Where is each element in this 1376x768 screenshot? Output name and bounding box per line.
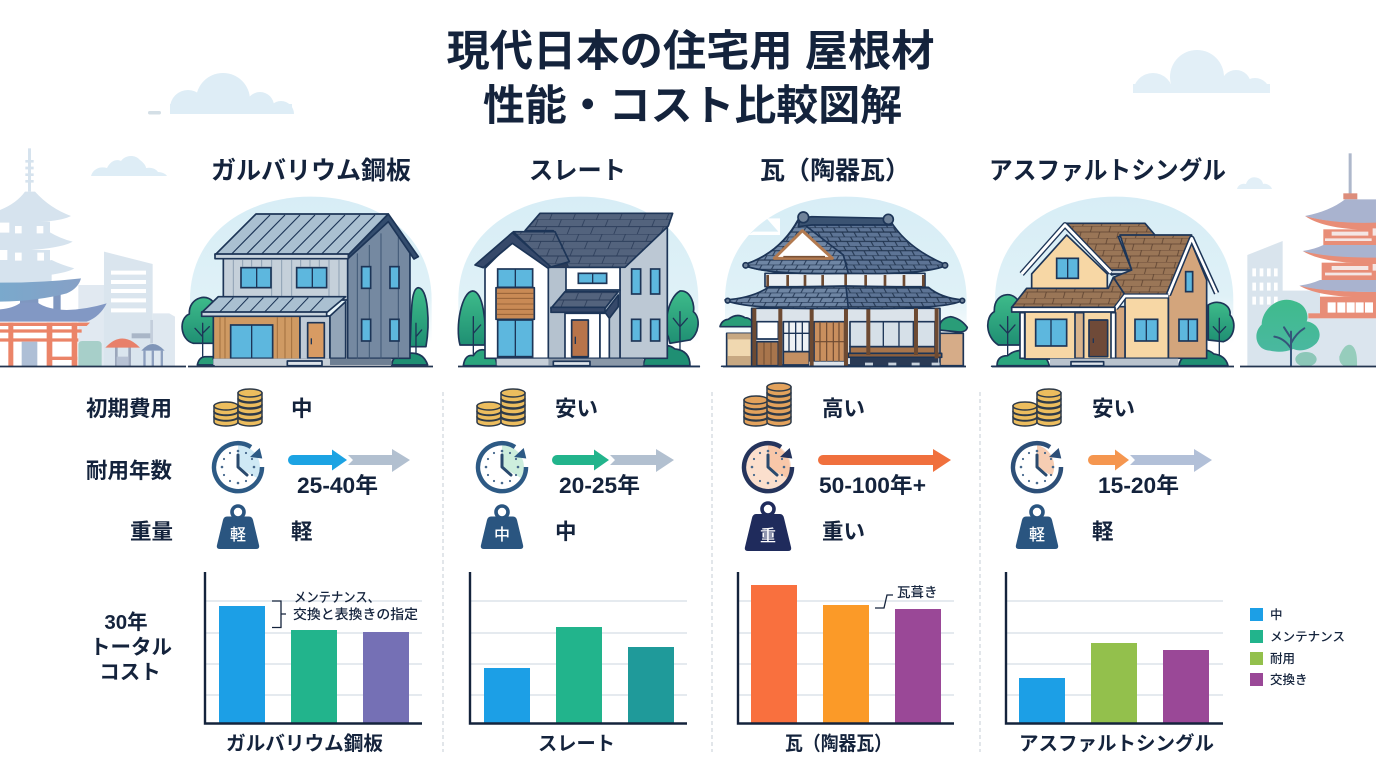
icon: weight: 軽	[1029, 526, 1045, 544]
legend: 交換き	[1270, 672, 1308, 687]
column heading: 瓦（陶器瓦）: 瓦（陶器瓦）	[760, 157, 910, 185]
icon: coins	[214, 389, 262, 426]
column heading: スレート: スレート	[529, 157, 626, 185]
row label: 30年トータルコスト: トータル	[90, 636, 172, 659]
icon: weight	[1016, 506, 1058, 549]
cloud: small right	[1237, 177, 1272, 189]
dashed column divider 2	[711, 392, 713, 752]
bar chart: 瓦（陶器瓦）	[738, 572, 954, 724]
icon: weight	[481, 506, 523, 549]
weight value: 軽	[1092, 520, 1114, 544]
row label: 30年トータルコスト: 30年	[104, 611, 148, 634]
legend	[1250, 607, 1345, 687]
bar chart: スレート	[470, 572, 687, 724]
chart label: スレート: スレート	[538, 733, 615, 755]
house: galvalume steel roof	[182, 197, 432, 366]
legend: メンテナンス	[1270, 630, 1345, 644]
house: slate roof	[458, 197, 699, 366]
title: 現代日本の住宅用 屋根材	[446, 28, 934, 76]
column heading: アスファルトシングル: アスファルトシングル	[989, 156, 1226, 185]
legend: 耐用	[1270, 652, 1295, 666]
column 4 metrics	[1013, 389, 1212, 549]
annotation: 瓦葺き	[875, 585, 938, 608]
icon: weight	[745, 503, 791, 551]
icon: clock	[214, 443, 262, 491]
chart label: 瓦（陶器瓦）: 瓦（陶器瓦）	[785, 733, 892, 755]
skyline: left temple and city	[0, 148, 175, 366]
annotation: bracket note	[272, 590, 418, 628]
lifespan value: 50-100年+	[819, 473, 926, 498]
arrow: lifespan	[552, 449, 674, 472]
cost value: 高い	[822, 397, 865, 421]
column 1 metrics	[214, 389, 410, 549]
weight value: 中	[555, 520, 577, 544]
arrow: lifespan	[1088, 449, 1212, 472]
icon: coins	[1013, 389, 1061, 426]
icon: coins	[744, 383, 791, 426]
skyline: right pagoda and city	[1247, 153, 1376, 367]
house: ceramic tile roof	[720, 197, 967, 366]
title	[446, 28, 934, 129]
column 2 metrics	[477, 389, 674, 549]
lifespan value: 20-25年	[559, 473, 640, 498]
row label: 30年トータルコスト	[90, 611, 172, 684]
cost value: 中	[291, 397, 313, 421]
row label: 30年トータルコスト: コスト	[99, 661, 161, 684]
annotation: 瓦葺き: 瓦葺き	[897, 585, 938, 600]
lifespan value: 15-20年	[1098, 473, 1179, 498]
row label: 耐用年数: 耐用年数	[86, 459, 173, 483]
ground line	[0, 366, 1376, 368]
annotation: bracket note: 交換と表換きの指定	[293, 606, 418, 622]
bar chart: ガルバリウム鋼板	[205, 572, 422, 724]
title: 性能・コスト比較図解	[483, 82, 902, 129]
arrow: lifespan	[288, 449, 410, 472]
annotation: bracket note: メンテナンス、	[294, 590, 380, 605]
row label: 初期費用: 初期費用	[86, 397, 172, 421]
bar chart: アスファルトシングル	[1006, 572, 1223, 724]
cost value: 安い	[555, 397, 598, 421]
column 3 metrics	[744, 383, 951, 551]
column heading: ガルバリウム鋼板: ガルバリウム鋼板	[211, 157, 411, 185]
icon: weight: 軽	[230, 526, 246, 544]
icon: coins	[477, 389, 525, 426]
row label: 重量: 重量	[130, 520, 173, 544]
weight value: 軽	[291, 520, 313, 544]
dashed column divider 3	[979, 392, 981, 752]
icon: weight: 中	[494, 526, 510, 544]
weight value: 重い	[822, 520, 865, 544]
icon: clock	[478, 443, 526, 491]
house: asphalt shingle roof	[988, 197, 1234, 366]
cloud: top left	[148, 73, 294, 114]
chart label: アスファルトシングル: アスファルトシングル	[1019, 732, 1214, 755]
cloud: small left	[91, 156, 167, 176]
icon: weight: 重	[760, 527, 776, 545]
arrow: lifespan	[818, 449, 951, 472]
chart label: ガルバリウム鋼板: ガルバリウム鋼板	[226, 733, 383, 755]
icon: weight	[217, 506, 259, 549]
cost value: 安い	[1092, 397, 1135, 421]
legend: 中	[1270, 607, 1283, 622]
cloud: top right	[1133, 50, 1270, 93]
lifespan value: 25-40年	[297, 473, 378, 498]
dashed column divider 1	[442, 392, 444, 752]
icon: clock	[1013, 443, 1061, 491]
icon: clock	[744, 443, 792, 491]
